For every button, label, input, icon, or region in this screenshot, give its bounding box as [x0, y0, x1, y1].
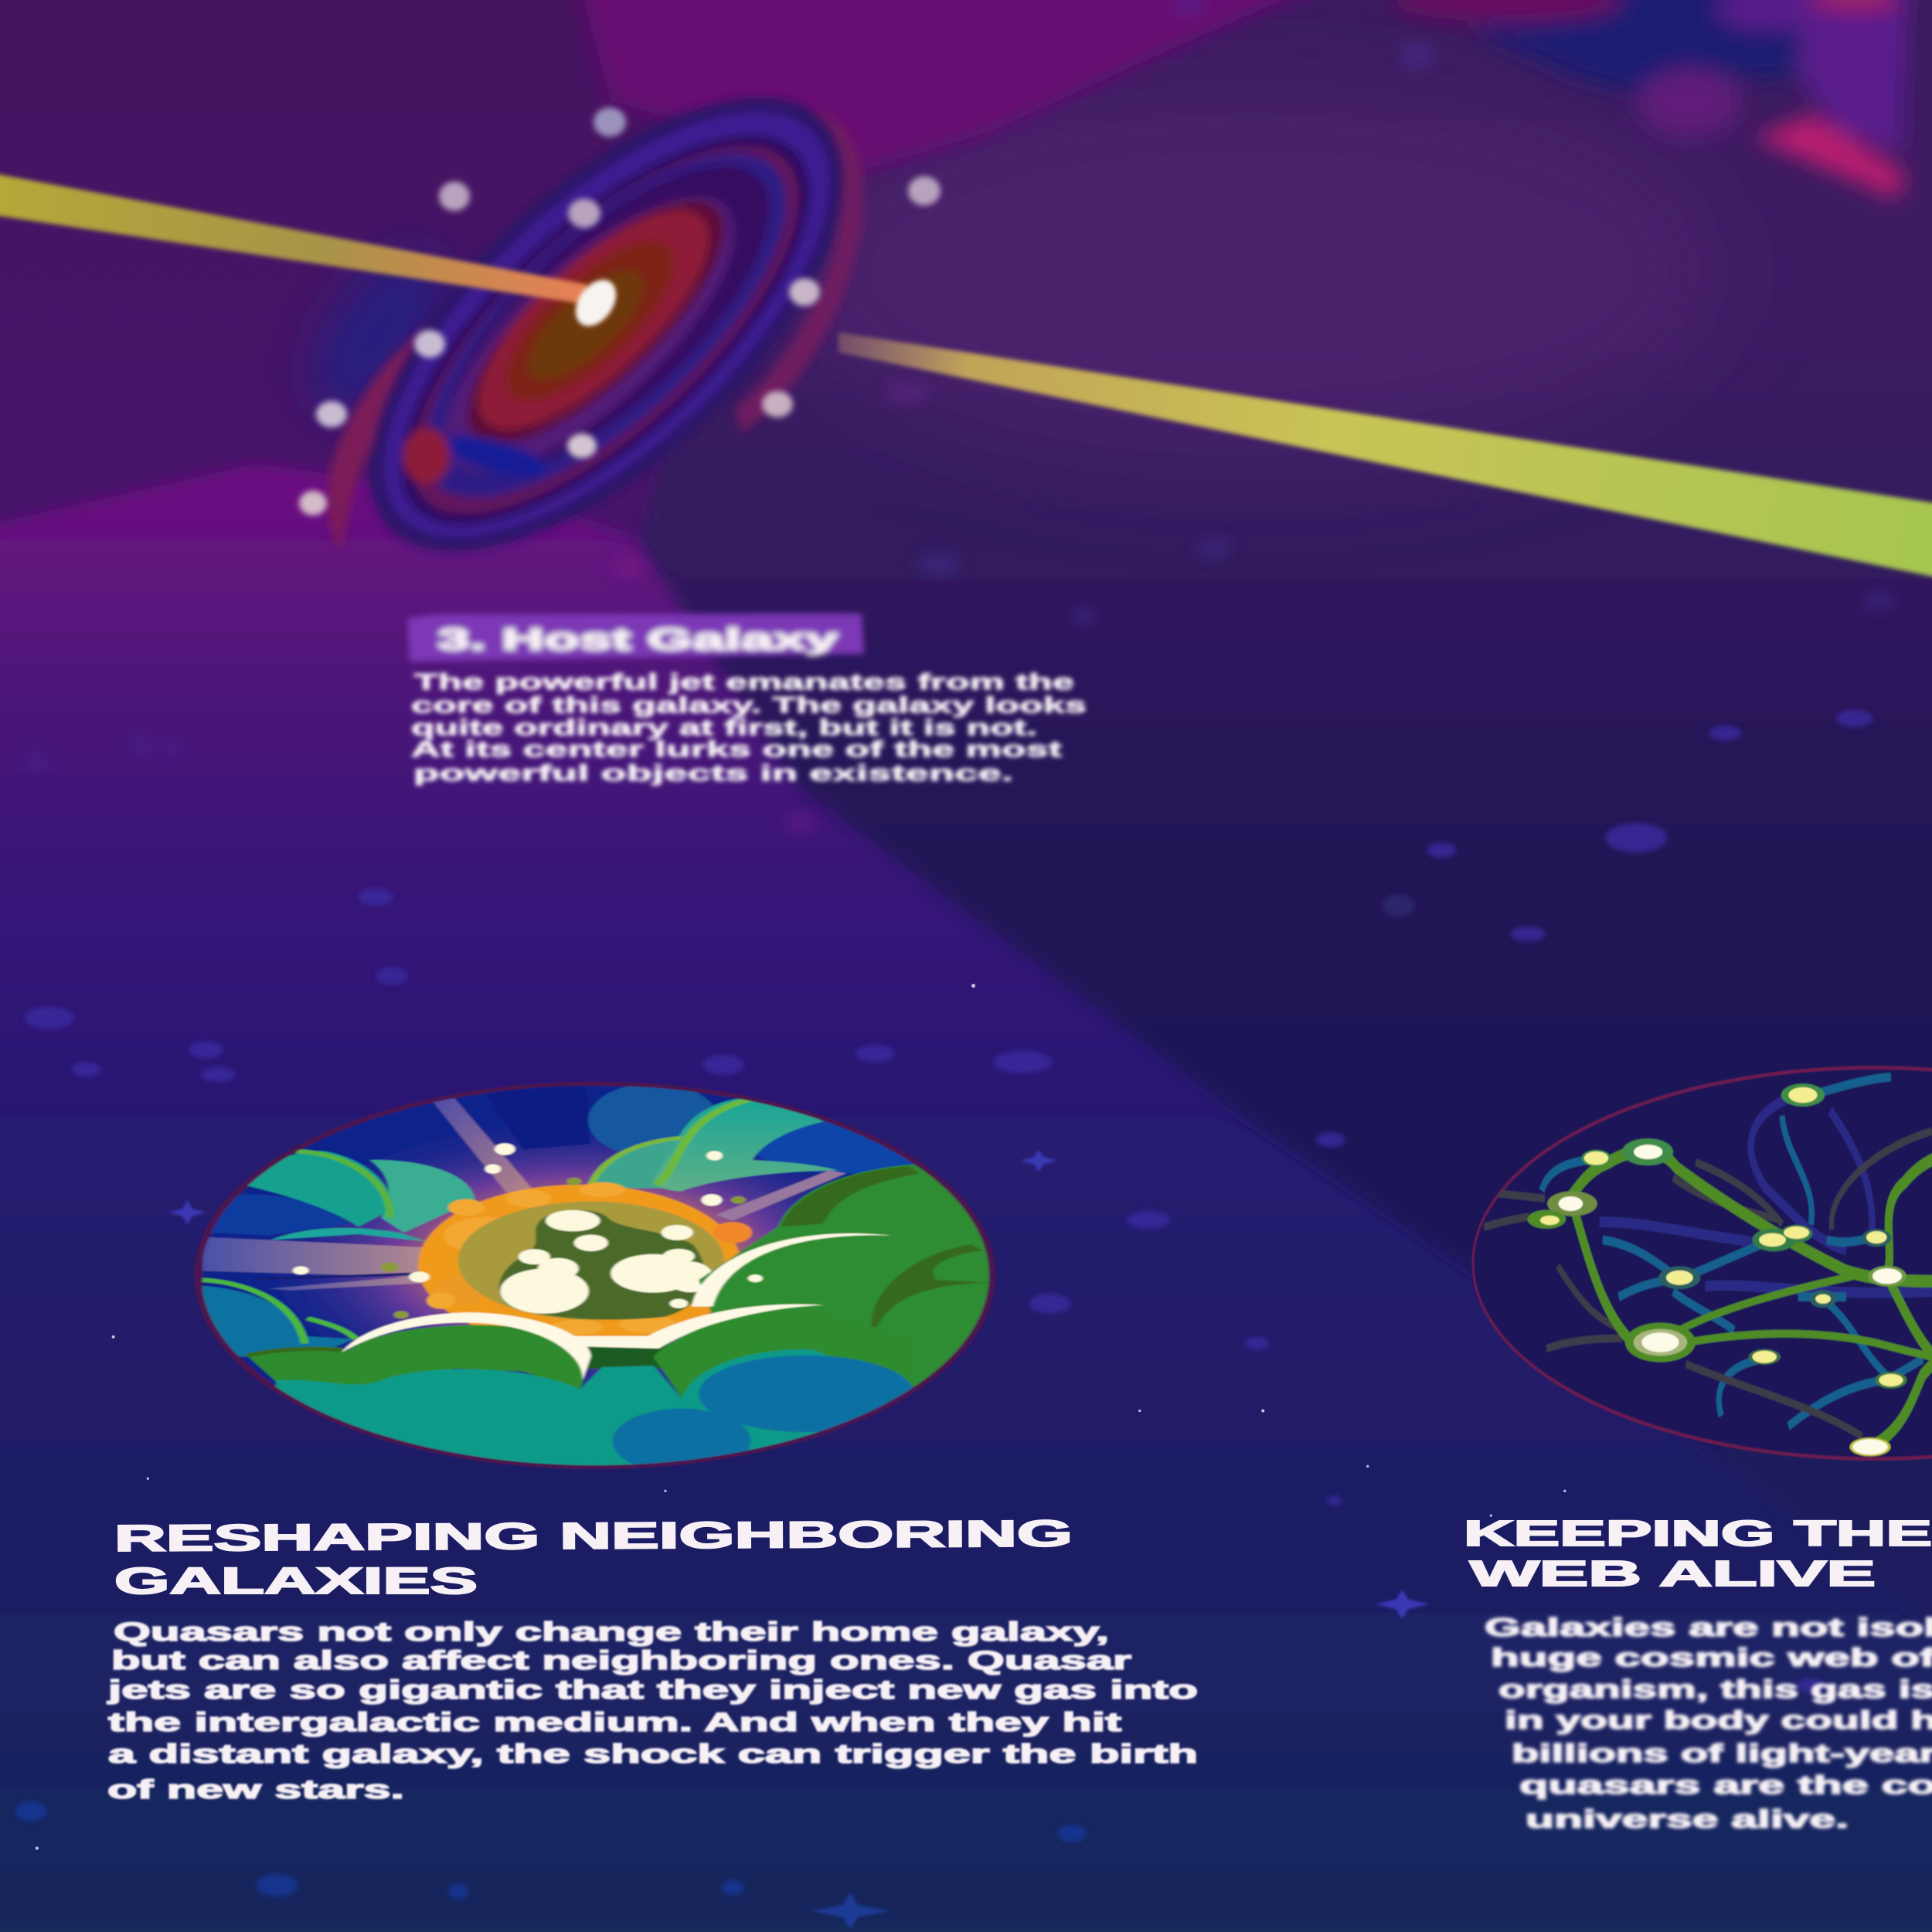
figure: blurred character at top right [1391, 0, 1909, 199]
dark streak [251, 1273, 415, 1280]
white nodes [1559, 1145, 1902, 1454]
ray lower-left thin [268, 1275, 430, 1291]
background stars: tiny white specks [36, 984, 1566, 1850]
label: 3. Host Galaxy heading [407, 614, 864, 662]
galaxy: blurred spiral with stars [295, 21, 918, 628]
figure: purple upper blob [1716, 0, 1824, 29]
blue bubble right [750, 1114, 942, 1173]
heading: reshaping neighboring galaxies: RESHAPING NEIGHBORING [114, 1514, 1073, 1560]
text block: host galaxy description: quite ordinary at first, but it is not. [411, 716, 1037, 740]
background panel: lower left magenta wedge [0, 464, 1932, 1932]
teal-blue bubble lower left [202, 1286, 353, 1357]
text block: keeping the web alive description: organism, this gas is [1498, 1675, 1932, 1703]
blue filaments [1542, 1077, 1923, 1427]
web circle ring [1473, 1067, 1932, 1459]
green main filaments [1549, 1151, 1932, 1447]
jet: upper left beam [0, 173, 587, 304]
galaxy ring: dark red [434, 165, 758, 479]
figure: dark blue silhouette [1422, 0, 1801, 100]
galaxy ring: red [447, 178, 740, 461]
illustration: cosmic web circle [1473, 1067, 1932, 1459]
galaxy: surrounding stars [299, 107, 940, 515]
text block: host galaxy description: At its center lurks one of the most [411, 737, 1063, 762]
galaxy ring: dark separator [341, 73, 870, 587]
label text: 3. Host Galaxy [437, 624, 838, 656]
green bubble left [245, 1325, 585, 1389]
background panel: top magenta band [572, 0, 1391, 174]
teal bubble left [245, 1151, 393, 1226]
text block: keeping the web alive description: quasars are the co [1519, 1770, 1932, 1799]
green arc left [296, 1151, 390, 1218]
dark rim left [245, 1347, 345, 1357]
galaxy ring: dark purple [400, 117, 816, 522]
text block: keeping the web alive description: Galaxies are not isol [1485, 1613, 1932, 1641]
background stars: far blurred dots [26, 0, 1896, 832]
heading: reshaping neighboring galaxies: GALAXIES [114, 1561, 478, 1602]
teal light bubble left [370, 1160, 474, 1233]
olive dots [381, 1178, 746, 1318]
text block: reshaping neighboring galaxies description: a distant galaxy, the shock can trigger the birth [108, 1740, 1198, 1769]
figure: purple knee blob [1638, 68, 1743, 138]
background glow: blue haze left of galaxy [287, 230, 470, 435]
blue bubble foreground bottom [613, 1409, 751, 1474]
text block: host galaxy description [411, 670, 1087, 786]
text block: reshaping neighboring galaxies description: jets are so gigantic that they inject new gas into [107, 1675, 1198, 1705]
blue bubble left [202, 1194, 350, 1236]
cream blobs in sphere [500, 1210, 713, 1314]
teal bubble right [653, 1098, 838, 1191]
grey filaments [1484, 1131, 1932, 1437]
glow behind sphere [273, 1128, 821, 1395]
olive inner sphere [457, 1202, 724, 1320]
figure: maroon blob [1391, 0, 1623, 22]
node halos [1527, 1083, 1907, 1456]
text block: host galaxy description: core of this galaxy. The galaxy looks [411, 693, 1087, 718]
galaxy: blue patch on ring [438, 427, 551, 485]
orange sphere [418, 1185, 741, 1345]
text block: reshaping neighboring galaxies description: but can also affect neighboring ones. Quasar [111, 1646, 1131, 1675]
ray upper [431, 1097, 534, 1196]
cream arc right [692, 1233, 891, 1307]
blue bubble foreground right [699, 1355, 914, 1432]
text block: reshaping neighboring galaxies description: Quasars not only change their home galaxy, [114, 1617, 1109, 1647]
faint purple filaments [1600, 1095, 1932, 1293]
green bubble middle right [653, 1308, 914, 1398]
green thin filaments [1660, 1276, 1932, 1359]
galaxy ring: red-violet [406, 155, 774, 512]
heading: reshaping neighboring galaxies [114, 1514, 1073, 1602]
background stars: four-point sparkles [168, 1150, 1430, 1930]
galaxy ring: outer dark-blue disc [295, 21, 918, 628]
text block: keeping the web alive description: in your body could h [1505, 1706, 1932, 1734]
yellow nodes [1540, 1087, 1903, 1386]
galaxy ring: brown red [483, 216, 698, 425]
text block: keeping the web alive description: universe alive. [1526, 1804, 1849, 1833]
label background [407, 614, 864, 662]
text block: reshaping neighboring galaxies description: of new stars. [107, 1775, 404, 1804]
text block: host galaxy description: powerful objects in existence. [413, 761, 1013, 786]
illustration outer ring [198, 1083, 992, 1467]
galaxy: red spiral arm upper right [734, 111, 864, 433]
green arcs lower left [202, 1280, 355, 1343]
sky top [485, 1086, 591, 1150]
ray lower-left [202, 1237, 427, 1277]
figure: red top accent [1808, 0, 1901, 9]
illustration clipped contents [202, 1073, 1005, 1474]
heading: keeping the web alive [1464, 1513, 1932, 1594]
galaxy ring: purple [316, 42, 897, 607]
jet: lower right beam [838, 332, 1932, 578]
figure: pink foot [1753, 114, 1906, 199]
galaxy ring: ochre core [512, 253, 660, 397]
galaxy: red crescent on ring [403, 428, 450, 484]
figure: purple leg [1801, 0, 1909, 151]
galaxy ring: blue-violet [372, 99, 839, 553]
lilac ray right [716, 1171, 846, 1221]
back teal bubble [591, 1138, 682, 1189]
big green bubble right [699, 1165, 1005, 1389]
text block: keeping the web alive description [1485, 1613, 1932, 1833]
text block: reshaping neighboring galaxies description [107, 1617, 1198, 1804]
galaxy: white core [567, 272, 624, 334]
text block: keeping the web alive description: huge cosmic web of [1491, 1643, 1932, 1672]
background stars: scattered blue dots [15, 709, 1872, 1899]
galaxy: concentric elliptical rings [295, 21, 918, 628]
background haze: lighter purple area on right [788, 85, 1716, 456]
dark green crescent top right [781, 1166, 920, 1226]
cream star dots [293, 1143, 723, 1282]
blue bubble top [586, 1085, 714, 1151]
galaxy ring: red arm [357, 89, 854, 571]
green arcs top right [656, 1100, 750, 1185]
central dark strip [571, 1342, 668, 1369]
teal foreground [268, 1349, 914, 1472]
cream star on green [748, 1274, 763, 1282]
web clipped contents [1484, 1077, 1932, 1456]
galaxy: red spiral arm lower left [328, 270, 510, 553]
dark green core shape [499, 1210, 706, 1320]
text block: reshaping neighboring galaxies description: the intergalactic medium. And when they hit [108, 1708, 1121, 1737]
cream arc middle [574, 1304, 823, 1349]
teal wisp left [270, 1228, 427, 1241]
text block: host galaxy description: The powerful jet emanates from the [414, 670, 1074, 695]
text block: keeping the web alive description: billions of light-year [1512, 1739, 1932, 1767]
node speckled ring [1634, 1329, 1687, 1355]
heading: keeping the web alive: KEEPING THE [1464, 1513, 1932, 1553]
illustration: reshaping neighboring galaxies circle [198, 1073, 1005, 1474]
heading: keeping the web alive: WEB ALIVE [1470, 1553, 1876, 1594]
background panel: dark right wedge [641, 0, 1932, 1685]
orange lumps on sphere [427, 1182, 752, 1335]
cream arc left [342, 1312, 591, 1380]
dark green crescent right [872, 1244, 993, 1327]
